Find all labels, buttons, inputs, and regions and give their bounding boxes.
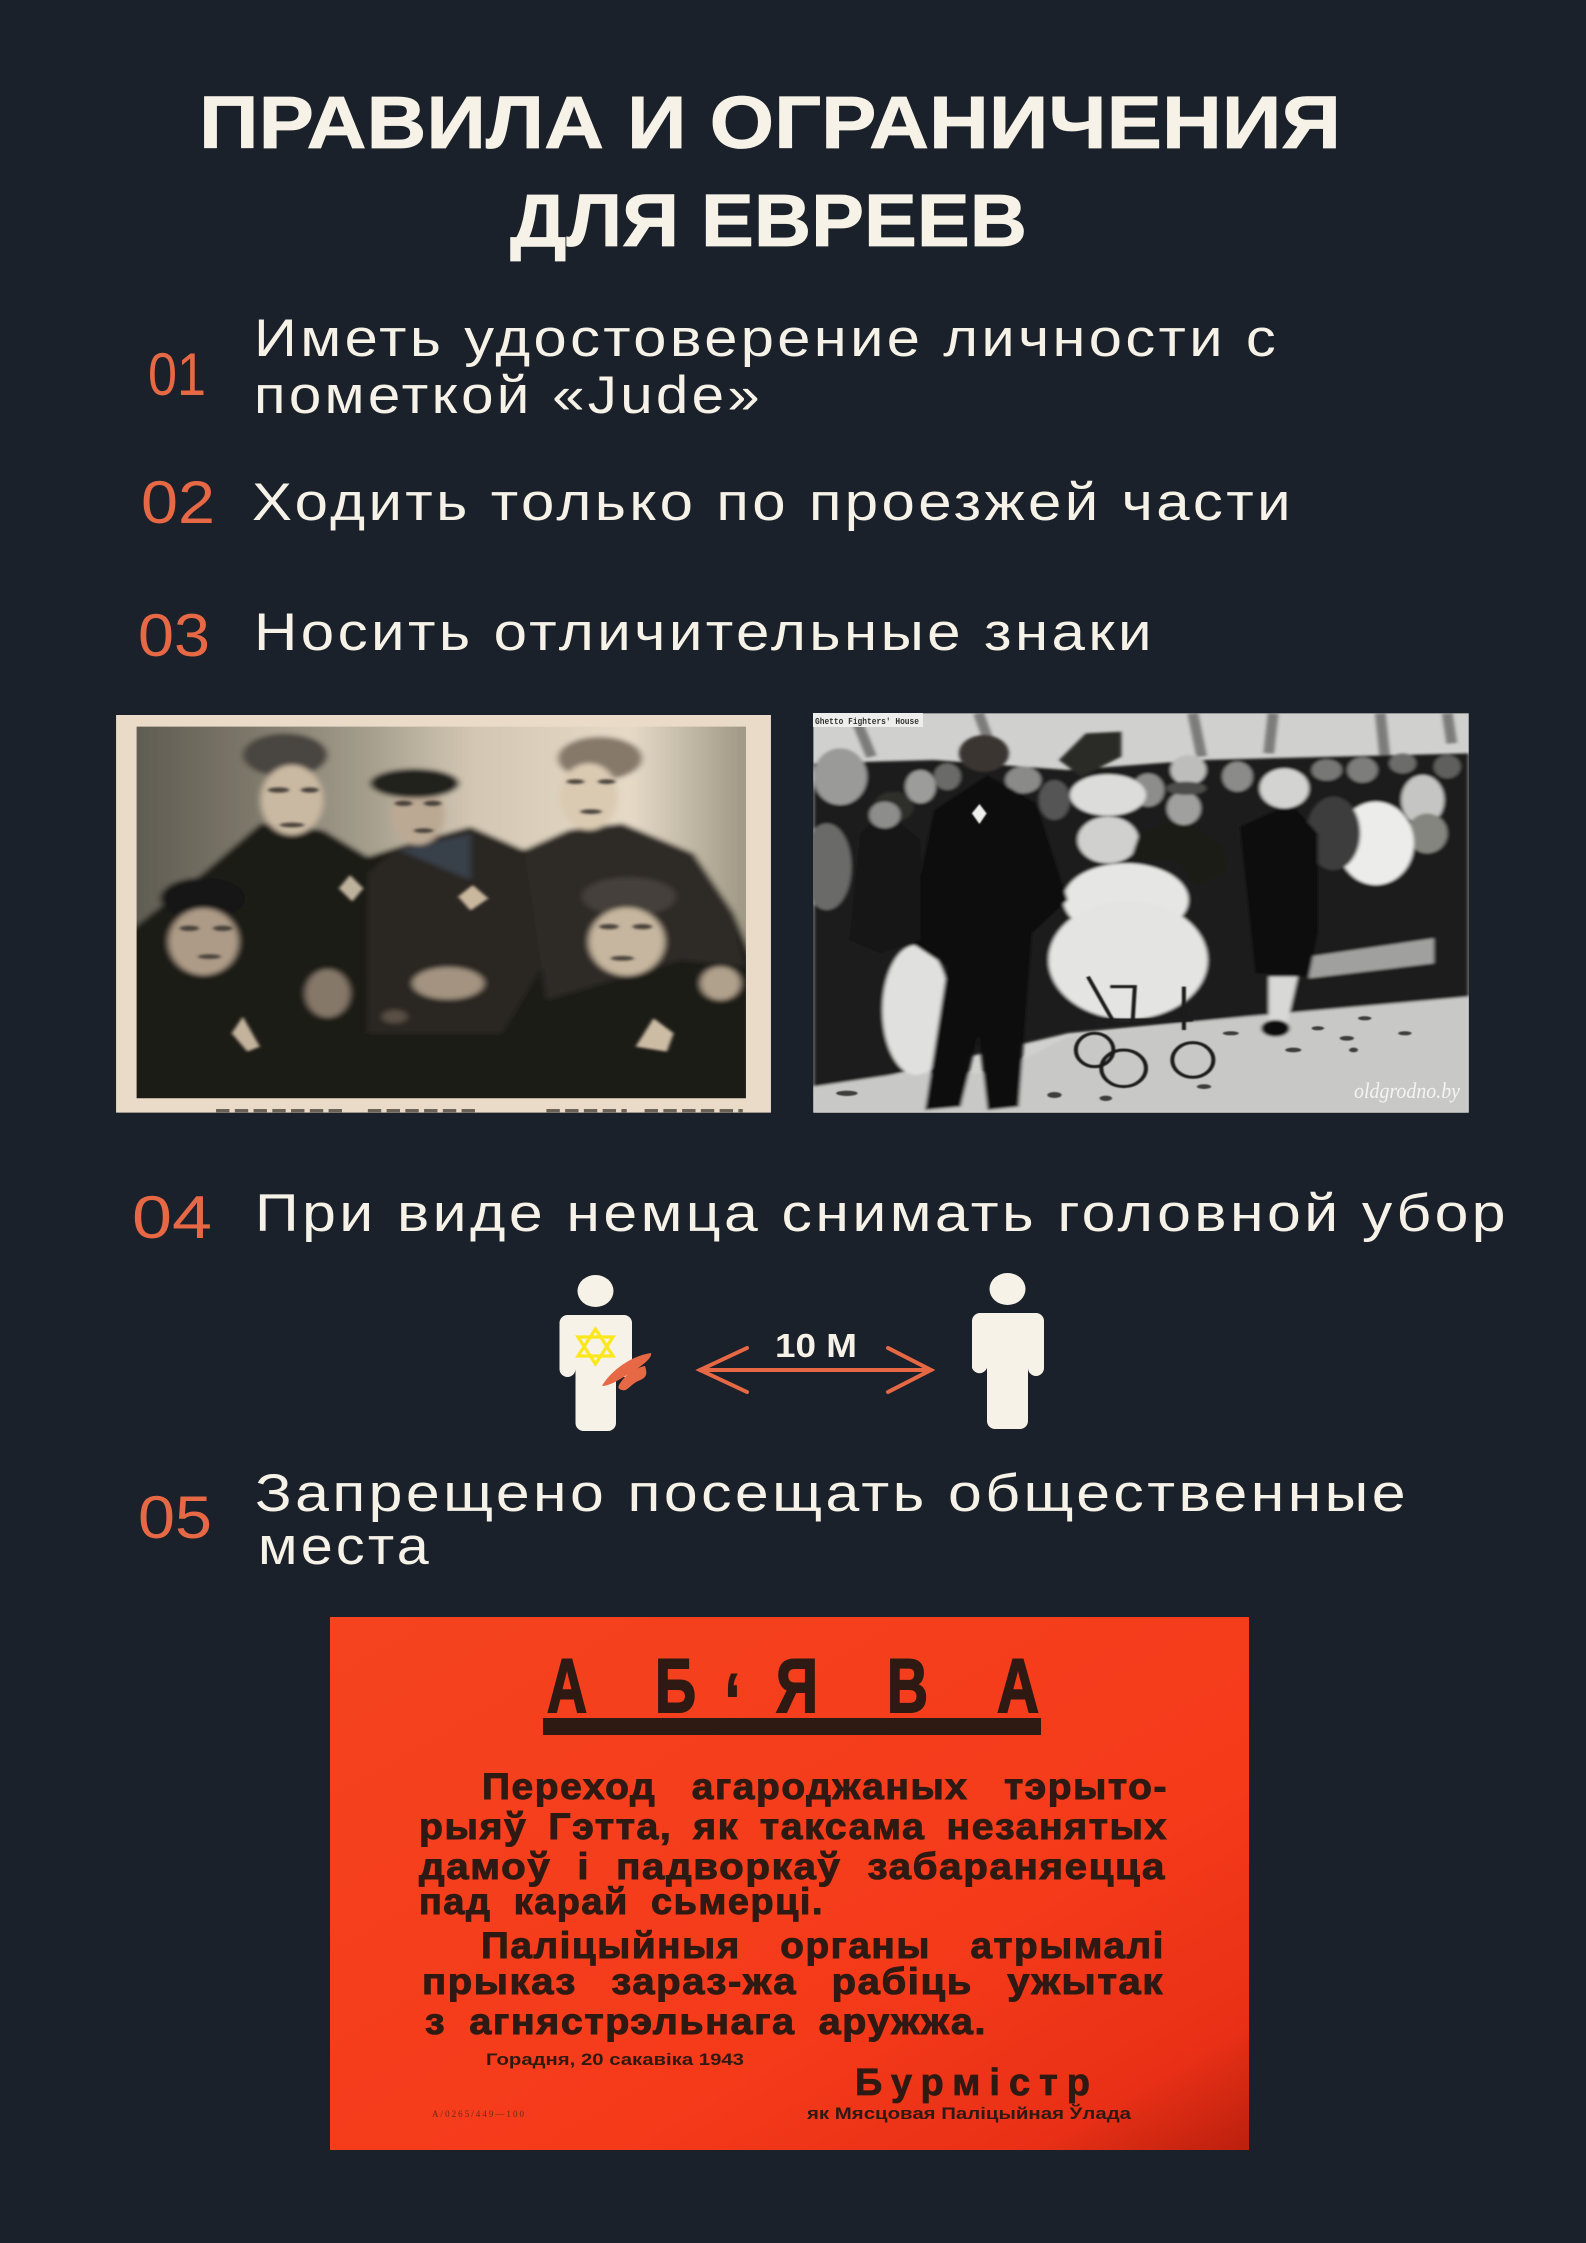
title: ДЛЯ ЕВРЕЕВ [510,179,1027,262]
poster heading: Б [655,1644,696,1729]
poster heading: А [547,1644,587,1729]
poster signature: Бурмістр [855,2062,1090,2104]
rule 04 [132,1184,1509,1251]
icon: jewish person with star removing hat [560,1275,651,1431]
rule 03 [138,602,1155,669]
poster heading: Я [776,1644,818,1729]
rule 01 text: пометкой «Jude» [254,366,763,425]
poster heading: ‘ [725,1659,740,1744]
rule 05 text: места [258,1517,432,1576]
photo: crowd with pram and bundles [802,713,1469,1113]
number 01: 01 [148,341,206,408]
rule 05 text: Запрещено посещать общественные [255,1464,1409,1523]
title: ПРАВИЛА И ОГРАНИЧЕНИЯ [199,81,1341,164]
title [199,81,1341,262]
label: photo credit top: Ghetto Fighters' House [815,717,919,727]
poster heading: В [887,1644,928,1729]
rule 02 text: Ходить только по проезжей части [252,473,1294,532]
arrow: ten metre distance [700,1348,931,1392]
poster authority line: як Мясцовая Паліцыйная Ўлада [806,2103,1132,2123]
poster body text: рыяў Гэтта, як таксама незанятых [419,1806,1168,1847]
rule 05 text [255,1464,1409,1576]
rule 01 text: Иметь удостоверение личности с [254,309,1279,368]
number 04: 04 [132,1184,212,1251]
label: watermark oldgrodno.by: oldgrodno.by [1354,1078,1460,1103]
poster heading [543,1644,1041,1744]
number 02: 02 [141,469,215,536]
poster heading: А [997,1644,1039,1729]
poster body text: Паліцыйныя органы атрымалі [481,1925,1165,1966]
number 05: 05 [138,1484,212,1551]
poster body text: Переход агароджаных тэрыто- [482,1766,1168,1807]
poster body text: дамоў і падворкаў забараняецца [419,1846,1166,1887]
rule 01 text [254,309,1279,425]
label: 10 m: 10 М [775,1327,857,1364]
poster body text [419,1766,1168,2042]
rule 01 [148,309,1279,425]
poster print code: А/0265/449—100 [432,2109,524,2119]
poster: АБ'ЯВА notice [330,1617,1249,2150]
rule 03 text: Носить отличительные знаки [254,603,1155,662]
poster body text: з агнястрэльнага аружжа. [425,2001,987,2042]
icon: german person [972,1273,1044,1429]
poster date: Горадня, 20 сакавіка 1943 [486,2050,744,2069]
rule 04 text: При виде немца снимать головной убор [255,1184,1509,1243]
icon: hat in hand [602,1353,651,1390]
photo: five men wearing stars [116,715,771,1113]
label: photo credit top [813,713,923,727]
poster body text: прыказ зараз-жа рабіць ужытак [422,1961,1164,2002]
poster body text: пад карай сьмерці. [419,1881,824,1922]
icon: yellow star of David [578,1329,613,1364]
rule 02 [141,469,1294,536]
rule 05 [138,1464,1409,1576]
number 03: 03 [138,602,210,669]
